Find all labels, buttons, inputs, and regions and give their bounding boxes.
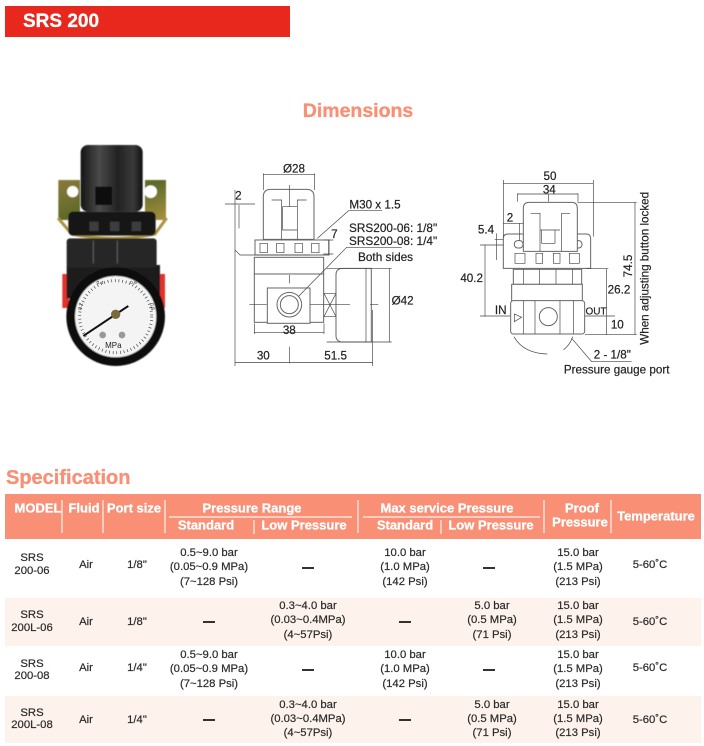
row: SRS 200L-08 [11, 699, 667, 739]
side view dimension drawing: 2 [235, 189, 242, 202]
table header: Low Pressure [261, 518, 347, 532]
row: SRS 200L-06: 0.3~4.0 bar [279, 600, 337, 612]
row: SRS 200-06: SRS [20, 552, 44, 564]
side view callouts: port sizes: Both sides [358, 250, 413, 264]
row: SRS 200L-08: (71 Psi) [473, 727, 512, 739]
row: SRS 200L-06: 5.0 bar [474, 600, 510, 612]
row: SRS 200-06: (142 Psi) [382, 576, 428, 588]
row: SRS 200L-08: 5.0 bar [474, 699, 510, 711]
row: SRS 200L-06: (71 Psi) [473, 629, 512, 641]
row: SRS 200L-08: (0.5 MPa) [467, 713, 517, 725]
row: SRS 200-08: 0.5~9.0 bar [180, 649, 238, 661]
side view dimension drawing: M30 x 1.5 [349, 199, 401, 212]
side view dimension drawing: 38 [283, 324, 296, 337]
side view dimension drawing: Ø42 [392, 295, 414, 308]
row: SRS 200L-06: (4~57Psi) [284, 629, 333, 641]
table header: Standard [377, 518, 433, 532]
side view dimension drawing: Ø28 [283, 163, 305, 176]
row: SRS 200-08: 200-08 [14, 670, 50, 682]
row: SRS 200L-06: 5-60˚C [633, 616, 667, 628]
product photo: regulator with gauge: 0.6 [130, 280, 137, 286]
front view dimension drawing: When adjusting button locked [638, 192, 651, 345]
row: SRS 200-08: (213 Psi) [555, 678, 601, 690]
row: SRS 200-08: (1.5 MPa) [553, 663, 603, 675]
product photo: regulator with gauge: 0.8 [148, 303, 155, 311]
specification table [5, 494, 701, 743]
table header: Temperature [617, 508, 695, 524]
row: SRS 200-08: 5-60˚C [633, 662, 667, 674]
row: SRS 200L-08: SRS [20, 707, 44, 719]
table header: Pressure [552, 514, 608, 530]
side view dimension drawing: 51.5 [324, 349, 347, 362]
table header: Fluid [68, 500, 100, 516]
front view dimension drawing: IN [495, 304, 506, 317]
heading: dimensions: Dimensions [303, 100, 413, 122]
front view dimension drawing: 34 [543, 183, 556, 196]
row: SRS 200L-06: SRS [20, 609, 44, 621]
row: SRS 200-08: SRS [20, 658, 44, 670]
front view dimension drawing: OUT [585, 306, 607, 317]
row: SRS 200-06: (1.0 MPa) [380, 561, 430, 573]
front view dimension drawing: 50 [544, 170, 557, 183]
product photo: regulator with gauge [58, 145, 167, 366]
row: SRS 200-08: (142 Psi) [382, 678, 428, 690]
side view dimension drawing [225, 163, 414, 366]
row: SRS 200-06: 1/8" [127, 559, 147, 571]
side view dimension drawing: 30 [257, 349, 270, 362]
row: SRS 200-06: 5-60˚C [633, 559, 667, 571]
row: SRS 200-06: 15.0 bar [557, 547, 599, 559]
table header: Pressure Range [202, 500, 302, 516]
front view dimension drawing: 26.2 [608, 283, 630, 296]
front view dimension drawing: 2 - 1/8" [594, 349, 631, 362]
row: SRS 200-08: (0.05~0.9 MPa) [170, 663, 248, 675]
row: SRS 200L-06: (1.5 MPa) [553, 614, 603, 626]
row: SRS 200L-06: 15.0 bar [557, 600, 599, 612]
side view callouts: port sizes: SRS200-06: 1/8" [349, 221, 437, 235]
front view dimension drawing: Pressure gauge port [564, 363, 670, 376]
row: SRS 200L-06: (0.03~0.4MPa) [270, 614, 346, 626]
row: SRS 200-08 [14, 649, 667, 690]
row: SRS 200-06: (0.05~0.9 MPa) [170, 561, 248, 573]
title banner: SRS 200 [23, 11, 99, 32]
row: SRS 200L-08: (4~57Psi) [284, 727, 333, 739]
row: SRS 200-08: Air [79, 662, 93, 674]
row: SRS 200-08: 15.0 bar [557, 649, 599, 661]
row: SRS 200L-08: 15.0 bar [557, 699, 599, 711]
row: SRS 200L-06: 200L-06 [11, 622, 53, 634]
row: SRS 200L-06: (0.5 MPa) [467, 614, 517, 626]
row: SRS 200L-08: 5-60˚C [633, 714, 667, 726]
row: SRS 200-06: Air [79, 559, 93, 571]
side view callouts: port sizes: SRS200-08: 1/4" [349, 234, 437, 248]
row: SRS 200L-08: Air [79, 714, 93, 726]
row: SRS 200-06: 200-06 [14, 565, 50, 577]
row: SRS 200-06: (1.5 MPa) [553, 561, 603, 573]
heading: specification: Specification [6, 467, 130, 489]
side view callouts: port sizes [349, 221, 437, 264]
row: SRS 200-06: 0.5~9.0 bar [180, 547, 238, 559]
row: SRS 200L-08: (213 Psi) [555, 727, 601, 739]
row: SRS 200-06: (7~128 Psi) [180, 576, 238, 588]
table header: Proof [565, 500, 600, 516]
product photo: regulator with gauge: 0.2 [77, 302, 85, 310]
side view dimension drawing: 7 [331, 228, 338, 241]
row shading [5, 598, 701, 743]
front view dimension drawing: 10 [611, 319, 624, 332]
title banner [5, 6, 290, 37]
product photo: regulator with gauge: MPa [105, 341, 122, 350]
table header [5, 494, 701, 539]
row: SRS 200L-08: 200L-08 [11, 719, 53, 731]
row: SRS 200-06: 10.0 bar [384, 547, 426, 559]
front view dimension drawing: 74.5 [622, 255, 635, 277]
table header: Low Pressure [448, 518, 534, 532]
row: SRS 200-08: 1/4" [127, 662, 147, 674]
row: SRS 200L-08: (0.03~0.4MPa) [270, 713, 346, 725]
front view dimension drawing [460, 170, 670, 376]
row: SRS 200L-08: 0.3~4.0 bar [279, 699, 337, 711]
front view dimension drawing: 40.2 [460, 272, 483, 285]
row: SRS 200-08: (1.0 MPa) [380, 663, 430, 675]
table header: MODEL [15, 500, 62, 516]
table header: Max service Pressure [381, 500, 513, 516]
table header: Standard [178, 518, 234, 532]
row: SRS 200-08: 10.0 bar [384, 649, 426, 661]
front view dimension drawing: 5.4 [478, 223, 495, 236]
row: SRS 200L-08: 1/4" [127, 714, 147, 726]
product photo: regulator with gauge: 0.4 [97, 280, 104, 286]
row: SRS 200L-06 [11, 600, 667, 641]
row: SRS 200-06 [14, 547, 667, 588]
row: SRS 200L-06: Air [79, 616, 93, 628]
row: SRS 200-08: (7~128 Psi) [180, 678, 238, 690]
table header: Port size [107, 500, 161, 516]
row: SRS 200L-06: (213 Psi) [555, 629, 601, 641]
row: SRS 200-06: (213 Psi) [555, 576, 601, 588]
front view dimension drawing: 2 [507, 212, 513, 225]
row: SRS 200L-06: 1/8" [127, 616, 147, 628]
row: SRS 200L-08: (1.5 MPa) [553, 713, 603, 725]
